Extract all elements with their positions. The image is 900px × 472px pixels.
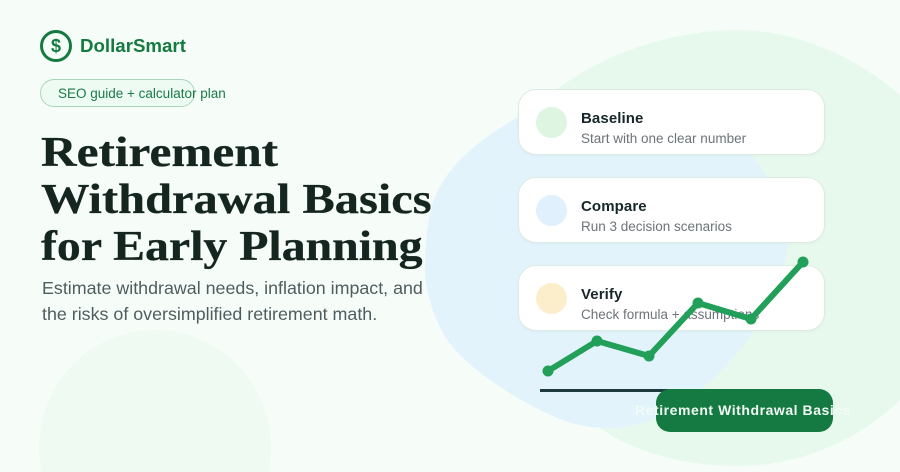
title: Withdrawal Basics bbox=[41, 177, 432, 223]
card text: Start with one clear number bbox=[581, 131, 746, 146]
card heading: Baseline bbox=[581, 110, 644, 127]
icon: blue dot bbox=[536, 195, 567, 226]
card text: Check formula + assumptions bbox=[581, 307, 759, 322]
button bbox=[656, 389, 833, 432]
trend line bbox=[542, 256, 808, 376]
card: compare bbox=[518, 177, 825, 243]
title: for Early Planning bbox=[41, 224, 423, 270]
pill text: SEO guide + calculator plan bbox=[58, 86, 226, 101]
pill outline bbox=[40, 79, 195, 107]
card heading: Verify bbox=[581, 286, 622, 303]
icon: green dot bbox=[536, 107, 567, 138]
card heading: Compare bbox=[581, 198, 647, 215]
tag pill bbox=[40, 79, 226, 107]
card: baseline bbox=[518, 89, 825, 155]
icon: dollar coin: $ bbox=[51, 36, 61, 56]
title bbox=[41, 130, 432, 270]
brand name: DollarSmart bbox=[80, 35, 186, 56]
icon: dollar coin bbox=[40, 30, 72, 62]
icon: yellow dot bbox=[536, 283, 567, 314]
subtitle: Estimate withdrawal needs, inflation impact, and bbox=[42, 278, 423, 298]
button label: Retirement Withdrawal Basics bbox=[635, 402, 851, 418]
chart axis bbox=[540, 389, 815, 392]
card: verify bbox=[518, 265, 825, 331]
logo bbox=[40, 30, 186, 62]
subtitle: the risks of oversimplified retirement math. bbox=[42, 304, 377, 324]
title: Retirement bbox=[41, 130, 278, 176]
subtitle bbox=[42, 278, 423, 324]
card text: Run 3 decision scenarios bbox=[581, 219, 732, 234]
